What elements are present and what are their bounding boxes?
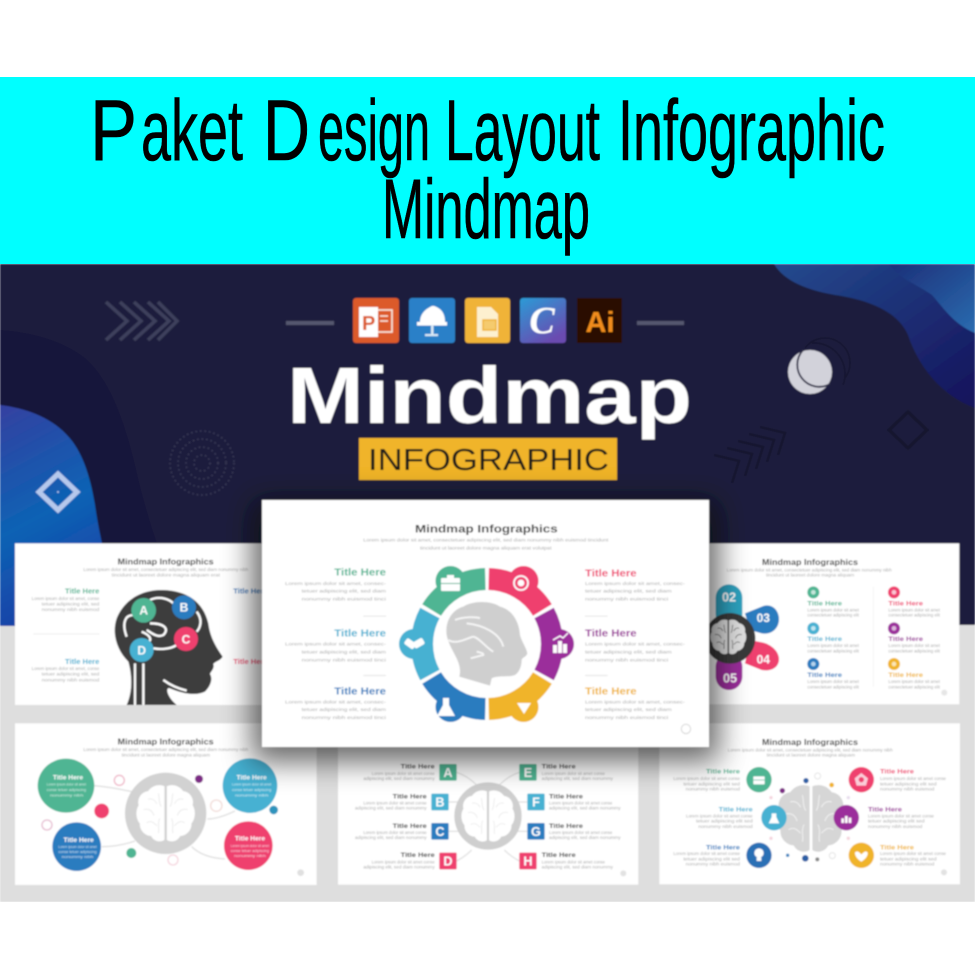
left titles and text: Title Here bbox=[401, 764, 435, 771]
left texts: Title Here bbox=[706, 844, 740, 851]
right texts: Title Here bbox=[868, 807, 902, 814]
slide intro text: tincidunt ut laoreet dolore magna aliquam bbox=[766, 573, 854, 578]
letter box H bbox=[519, 853, 537, 869]
title line 1: esign bbox=[318, 83, 430, 179]
list item column 1: consectetuer adipiscing elit bbox=[807, 613, 860, 618]
letter box B bbox=[431, 794, 449, 810]
slide intro text: Lorem ipsum dolor sit amet, consectetuer adipiscing elit, sed diam nonummy nibh bbox=[83, 567, 249, 572]
left titles and text: Title Here bbox=[393, 793, 427, 800]
panel: bottom right icons slide bbox=[659, 723, 960, 884]
panel: bottom left circles slide bbox=[15, 723, 317, 885]
left texts: nonummy nibh euismod bbox=[686, 862, 740, 867]
right titles and text: Lorem ipsum dolor sit amet conse bbox=[549, 830, 613, 835]
central brain ring bbox=[454, 782, 522, 850]
right text blocks: nonummy nibh euismod tinci bbox=[585, 657, 668, 662]
petal 03: 03 bbox=[757, 611, 770, 625]
left texts: nonummy nibh euismod bbox=[698, 824, 753, 829]
letter box A: A bbox=[443, 766, 453, 780]
letter box B: B bbox=[435, 796, 445, 810]
infographic label bbox=[359, 438, 617, 480]
title line 1: Layout bbox=[445, 83, 600, 179]
bubble: green: conse tetuer adipiscing bbox=[47, 787, 86, 792]
left text blocks: nonummy nibh euismod tinci bbox=[302, 657, 386, 662]
right texts: nonummy nibh euismod bbox=[880, 862, 935, 867]
icon circle pink bbox=[849, 767, 874, 792]
left titles and text: adipiscing elit, sed diam nonummy bbox=[355, 806, 427, 811]
dark chevrons decoration bbox=[714, 427, 785, 483]
list item column 1: Lorem ipsum dolor sit amet bbox=[807, 643, 860, 648]
right titles and text: Lorem ipsum dolor sit amet conse bbox=[549, 801, 613, 806]
letter circle D: D bbox=[137, 643, 146, 657]
list item column 2 bbox=[888, 586, 941, 689]
bubble: teal bbox=[223, 758, 277, 813]
segment: yellow bbox=[489, 678, 542, 722]
letter box G bbox=[527, 823, 545, 840]
bubble: green: nonummy nibh bbox=[50, 792, 83, 797]
panel: right flower slide bbox=[705, 543, 959, 704]
bubble: pink bbox=[224, 821, 273, 870]
text block top left: Title Here bbox=[65, 587, 99, 596]
right text blocks: Lorem ipsum dolor sit amet, consec- bbox=[585, 581, 686, 586]
letter box C bbox=[431, 823, 449, 840]
icon: Google Slides bbox=[465, 298, 510, 343]
text block bottom left: Title Here bbox=[65, 657, 99, 666]
poster image bbox=[0, 264, 975, 902]
slide intro text bbox=[727, 568, 892, 578]
text block top left: Lorem ipsum dolor sit amet, conse bbox=[32, 596, 100, 601]
right texts: nonummy nibh euismod bbox=[868, 824, 923, 829]
list item column 2: Title Here bbox=[888, 636, 923, 643]
bubble: teal: Title Here bbox=[237, 775, 267, 782]
right texts: Lorem ipsum dolor sit amet conse bbox=[868, 813, 934, 818]
left texts: Lorem ipsum dolor sit amet conse bbox=[673, 851, 740, 856]
letter circle A: A bbox=[139, 604, 148, 618]
bubble: pink: conse tetuer adipiscing bbox=[231, 848, 269, 853]
bubble: blue: Title Here bbox=[64, 837, 94, 844]
petal 04: 04 bbox=[757, 652, 770, 666]
slide heading: Mindmap Infographics bbox=[415, 523, 558, 535]
dotted circle decoration bbox=[170, 431, 234, 495]
text block bottom left: tetuer adipiscing elit, sed bbox=[42, 672, 100, 677]
right texts: Title Here bbox=[880, 844, 914, 851]
bubble: teal: nonummy nibh bbox=[235, 792, 268, 797]
list item column 1: Lorem ipsum dolor sit amet bbox=[807, 607, 860, 612]
right texts: tetuer adipiscing elit sed bbox=[880, 856, 937, 861]
grey lower background bbox=[0, 625, 975, 902]
segment: blue bbox=[432, 678, 485, 722]
left text blocks: Title Here bbox=[334, 568, 386, 579]
right titles and text: Title Here bbox=[549, 823, 583, 830]
icon: Illustrator bbox=[577, 298, 622, 343]
icon: briefcase bbox=[441, 575, 460, 591]
moon decoration bbox=[788, 338, 850, 394]
list item column 1: consectetuer adipiscing elit bbox=[807, 684, 860, 689]
text blocks right, partly hidden bbox=[232, 587, 262, 665]
right titles and text: Title Here bbox=[549, 793, 583, 800]
petal 05 bbox=[716, 653, 742, 690]
head silhouette bbox=[115, 590, 223, 705]
right titles and text: adipiscing elit, sed diam nonummy bbox=[549, 835, 621, 840]
bubble: blue: nonummy nibh bbox=[62, 854, 93, 859]
bubble: blue: Lorem ipsum dolor sit amet bbox=[58, 844, 97, 849]
text block bottom left bbox=[32, 657, 100, 683]
left titles and text: adipiscing elit, sed diam nonummy bbox=[355, 835, 427, 840]
slide intro text: Lorem ipsum dolor sit amet, consectetuer adipiscing elit, sed diam nonummy nibh bbox=[727, 568, 892, 573]
segment: pink bbox=[489, 566, 542, 610]
list item column 1 bbox=[807, 586, 860, 689]
left text blocks: Lorem ipsum dolor sit amet, consec- bbox=[285, 699, 387, 704]
dark left blob bbox=[7, 405, 97, 522]
icon: chart bbox=[553, 633, 568, 653]
left text blocks: nonummy nibh euismod tinci bbox=[302, 597, 386, 602]
right text blocks: Title Here bbox=[585, 629, 637, 640]
left text blocks: nonummy nibh euismod tinci bbox=[302, 715, 386, 720]
left titles and text: adipiscing elit, sed diam nonummy bbox=[363, 776, 435, 781]
left texts bbox=[673, 769, 753, 867]
letter circle C: C bbox=[182, 632, 191, 646]
letter box F: F bbox=[532, 796, 540, 810]
left texts: Lorem ipsum dolor sit amet conse bbox=[686, 813, 753, 818]
left text blocks bbox=[285, 568, 387, 720]
letter box G: G bbox=[531, 825, 541, 839]
brain lines bbox=[124, 598, 200, 705]
letter circle B bbox=[172, 595, 196, 619]
right text blocks: tetuer adipiscing elit, sed diam bbox=[585, 589, 672, 594]
right texts bbox=[868, 769, 946, 867]
bubble: pink: Title Here bbox=[235, 835, 265, 842]
icon: Canva bbox=[520, 298, 566, 343]
left texts: nonummy nibh euismod bbox=[686, 787, 740, 792]
connector lines bbox=[94, 786, 235, 859]
text blocks right, partly hidden: Title Here bbox=[233, 657, 268, 666]
slide intro text: Lorem ipsum dolor sit amet, consectetuer adipiscing elit, sed diam nonummy nibh euismod tincidunt bbox=[363, 538, 609, 543]
right texts: Lorem ipsum dolor sit amet conse bbox=[880, 851, 946, 856]
text block top left: nonummy nibh euismod bbox=[42, 607, 100, 612]
list item column 2: Title Here bbox=[888, 600, 923, 607]
left titles and text: Title Here bbox=[401, 852, 435, 859]
letter circle A bbox=[131, 598, 156, 623]
title line 2: Mindmap bbox=[382, 162, 590, 256]
segment: purple bbox=[544, 613, 574, 675]
slide heading: Mindmap Infographics bbox=[762, 558, 859, 567]
title line 1 bbox=[90, 83, 885, 179]
right text blocks: Lorem ipsum dolor sit amet, consec- bbox=[585, 699, 686, 704]
icon: handshake bbox=[404, 637, 425, 650]
icon: target bbox=[514, 576, 528, 590]
blue left blob bbox=[0, 404, 103, 626]
right text blocks: nonummy nibh euismod tinci bbox=[585, 597, 668, 602]
icon: Illustrator: Ai bbox=[586, 307, 614, 339]
right text blocks: nonummy nibh euismod tinci bbox=[585, 715, 668, 720]
central brain ring bbox=[125, 773, 206, 854]
icon: diamond bbox=[517, 703, 531, 714]
left texts: Title Here bbox=[706, 769, 740, 776]
right titles and text: adipiscing elit, sed diam nonummy bbox=[549, 806, 621, 811]
slide intro text bbox=[83, 567, 249, 577]
left text blocks: tetuer adipiscing elit, sed diam bbox=[302, 589, 386, 594]
text block top left: tetuer adipiscing elit, sed bbox=[42, 601, 100, 606]
icon circle green bbox=[746, 767, 772, 792]
slide intro text bbox=[728, 747, 893, 758]
icon circle yellow bbox=[849, 843, 874, 868]
right text blocks: Title Here bbox=[585, 686, 637, 697]
icon: Keynote bbox=[409, 298, 455, 343]
right texts: tetuer adipiscing elit sed bbox=[880, 781, 937, 786]
text block top left bbox=[32, 587, 100, 612]
letter box F bbox=[527, 794, 545, 810]
letter circle B: B bbox=[180, 601, 189, 615]
list item column 1: Title Here bbox=[807, 636, 842, 643]
pale diamond decoration bbox=[39, 474, 77, 510]
dark background bbox=[0, 264, 975, 626]
list item column 1: Lorem ipsum dolor sit amet bbox=[807, 679, 860, 684]
slide intro text: tincidunt ut laoreet dolore magna aliquam bbox=[122, 752, 210, 757]
icon circle teal bbox=[761, 805, 787, 830]
icon circle blue bbox=[746, 843, 772, 868]
slide intro text: Lorem ipsum dolor sit amet, consectetuer adipiscing elit, sed diam nonummy nibh bbox=[83, 747, 249, 752]
small dots bbox=[769, 773, 850, 862]
title line 1: aket bbox=[141, 83, 243, 179]
icon: PowerPoint: P bbox=[362, 313, 375, 335]
left text blocks: Lorem ipsum dolor sit amet, consec- bbox=[285, 642, 387, 647]
panel: left head slide bbox=[15, 543, 268, 705]
left text blocks: Lorem ipsum dolor sit amet, consec- bbox=[285, 581, 387, 586]
right titles and text: Lorem ipsum dolor sit amet conse bbox=[542, 771, 605, 776]
right titles and text: adipiscing elit, sed diam nonummy bbox=[542, 776, 614, 781]
bubble: blue: conse tetuer adipiscing bbox=[58, 849, 97, 854]
right titles and text bbox=[542, 764, 621, 870]
letter box D bbox=[439, 853, 457, 869]
right text blocks: Lorem ipsum dolor sit amet, consec- bbox=[585, 642, 686, 647]
top right blob outer bbox=[774, 264, 975, 408]
bubble: pink: nonummy nibh bbox=[234, 853, 266, 858]
ring diagram bbox=[399, 566, 574, 722]
right titles and text: Lorem ipsum dolor sit amet conse bbox=[542, 859, 605, 864]
petal 02: 02 bbox=[722, 591, 736, 605]
list item column 1: Title Here bbox=[807, 672, 842, 679]
page number bbox=[681, 724, 691, 734]
slide heading: Mindmap Infographics bbox=[118, 737, 214, 746]
left titles and text: Lorem ipsum dolor sit amet conse bbox=[372, 859, 435, 864]
right text blocks: Title Here bbox=[585, 568, 637, 579]
letter box C: C bbox=[435, 825, 445, 839]
bubble: teal: conse tetuer adipiscing bbox=[232, 787, 271, 792]
petal 02 bbox=[714, 584, 744, 618]
slide intro text: tincidunt ut laoreet dolore magna aliquam bbox=[767, 753, 855, 758]
infographic label: INFOGRAPHIC bbox=[368, 442, 609, 477]
title banner bbox=[0, 77, 975, 264]
central slide shadow bbox=[252, 500, 719, 762]
right titles and text: Title Here bbox=[542, 764, 576, 771]
letter circle C bbox=[174, 627, 198, 651]
left texts: Title Here bbox=[719, 807, 753, 814]
right titles and text: Title Here bbox=[542, 852, 576, 859]
slide heading: Mindmap Infographics bbox=[118, 557, 214, 566]
bubble: green: Lorem ipsum dolor sit amet bbox=[47, 782, 87, 787]
left texts: tetuer adipiscing elit sed bbox=[683, 856, 740, 861]
bubble: pink: Lorem ipsum dolor sit amet bbox=[231, 843, 270, 848]
list item column 2: consectetuer adipiscing elit bbox=[888, 613, 941, 618]
grey head silhouette bbox=[446, 602, 527, 686]
right titles and text: adipiscing elit, sed diam nonummy bbox=[542, 865, 614, 870]
list item column 2: Title Here bbox=[888, 672, 923, 679]
top right blob inner bbox=[906, 264, 975, 334]
panel: central ring slide bbox=[262, 500, 709, 747]
left titles and text: Title Here bbox=[393, 823, 427, 830]
list item column 2: Lorem ipsum dolor sit amet bbox=[888, 643, 941, 648]
bubble: teal: Lorem ipsum dolor sit amet bbox=[232, 782, 272, 787]
slide intro text bbox=[83, 747, 249, 757]
left titles and text: Lorem ipsum dolor sit amet conse bbox=[363, 801, 427, 806]
bubble: green bbox=[38, 759, 94, 813]
right texts: nonummy nibh euismod bbox=[880, 787, 935, 792]
left texts: tetuer adipiscing elit sed bbox=[683, 781, 740, 786]
slide intro text bbox=[363, 538, 609, 551]
text blocks right, partly hidden: Title Here bbox=[233, 587, 268, 596]
slide text content bbox=[285, 523, 691, 734]
dash left bbox=[286, 321, 334, 325]
dash right bbox=[637, 321, 684, 325]
text block bottom left: nonummy nibh euismod bbox=[42, 678, 100, 683]
slide intro text: Lorem ipsum dolor sit amet, consectetuer adipiscing elit, sed diam nonummy nibh bbox=[728, 747, 893, 752]
petal 05: 05 bbox=[723, 672, 737, 686]
bubble: blue bbox=[52, 822, 101, 871]
left texts: tetuer adipiscing elit sed bbox=[696, 819, 753, 824]
icon circle purple bbox=[834, 805, 859, 830]
letter box E: E bbox=[524, 766, 532, 780]
segment: teal bbox=[399, 613, 430, 675]
left titles and text: Lorem ipsum dolor sit amet conse bbox=[363, 830, 427, 835]
left text blocks: tetuer adipiscing elit, sed diam bbox=[302, 707, 386, 712]
bubble: green: Title Here bbox=[53, 775, 83, 782]
slide intro text: tincidunt ut laoreet dolore magna aliquam erat bbox=[112, 572, 221, 577]
title line 1: P bbox=[90, 83, 137, 179]
slide heading: Mindmap Infographics bbox=[762, 738, 859, 747]
right text blocks: tetuer adipiscing elit, sed diam bbox=[585, 649, 672, 654]
dark diamond decoration bbox=[889, 412, 927, 448]
right text blocks bbox=[585, 568, 686, 720]
chevrons decoration bbox=[106, 302, 177, 340]
small decorative dots bbox=[42, 775, 304, 876]
panel: bottom middle letters slide bbox=[338, 723, 638, 885]
left titles and text: Lorem ipsum dolor sit amet conse bbox=[372, 771, 435, 776]
petal 04 bbox=[745, 640, 779, 670]
left titles and text: adipiscing elit, sed diam nonummy bbox=[363, 865, 435, 870]
letter box E bbox=[519, 764, 537, 781]
left text blocks: Title Here bbox=[334, 629, 386, 640]
list item column 2: consectetuer adipiscing elit bbox=[888, 648, 941, 653]
grey brain bbox=[776, 785, 846, 852]
text block bottom left: Lorem ipsum dolor sit amet, conse bbox=[32, 666, 100, 671]
segment: green bbox=[432, 566, 485, 610]
icon: PowerPoint bbox=[353, 298, 399, 343]
slide intro text: tincidunt ut laoreet dolore magna aliquam erat volutpat bbox=[420, 546, 552, 551]
right texts: Lorem ipsum dolor sit amet conse bbox=[880, 776, 946, 781]
right text blocks: tetuer adipiscing elit, sed diam bbox=[585, 707, 672, 712]
right texts: tetuer adipiscing elit sed bbox=[868, 819, 925, 824]
letter box A bbox=[439, 764, 457, 781]
icon: Canva: C bbox=[529, 300, 555, 342]
main heading: Mindmap bbox=[287, 351, 692, 440]
list item column 1: consectetuer adipiscing elit bbox=[807, 648, 860, 653]
central brain disc bbox=[705, 613, 755, 664]
letter circle D bbox=[130, 638, 154, 662]
right texts: Title Here bbox=[880, 769, 914, 776]
title line 1: D bbox=[263, 83, 310, 179]
left text blocks: tetuer adipiscing elit, sed diam bbox=[302, 649, 386, 654]
list item column 2: Lorem ipsum dolor sit amet bbox=[888, 679, 941, 684]
letter box H: H bbox=[523, 855, 533, 869]
letter box D: D bbox=[443, 855, 453, 869]
list item column 2: Lorem ipsum dolor sit amet bbox=[888, 607, 941, 612]
left titles and text bbox=[355, 764, 435, 870]
icon: flask bbox=[437, 698, 455, 716]
left text blocks: Title Here bbox=[334, 686, 386, 697]
petal 03 bbox=[745, 605, 779, 634]
left texts: Lorem ipsum dolor sit amet conse bbox=[673, 776, 740, 781]
list item column 1: Title Here bbox=[807, 600, 842, 607]
connector lines bbox=[449, 772, 527, 861]
list item column 2: consectetuer adipiscing elit bbox=[888, 684, 941, 689]
